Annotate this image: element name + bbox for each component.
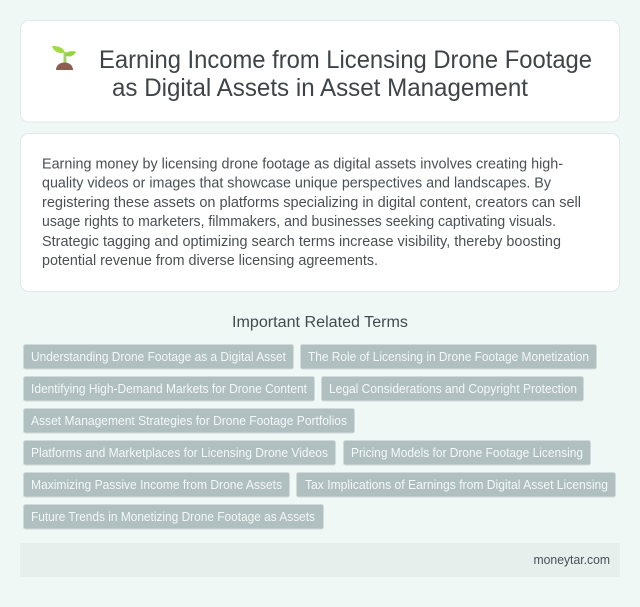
tag: Pricing Models for Drone Footage Licensing bbox=[351, 445, 583, 460]
tag: Identifying High-Demand Markets for Drone Content bbox=[31, 381, 307, 396]
description text: Earning money by licensing drone footage as digital assets involves creating high- bbox=[42, 156, 563, 172]
description text: registering these assets on platforms specializing in digital content, creators can sell bbox=[42, 194, 581, 211]
tag bbox=[296, 472, 616, 497]
tag: Legal Considerations and Copyright Protection bbox=[329, 381, 577, 396]
tag bbox=[344, 440, 590, 465]
tag: Future Trends in Monetizing Drone Footage as Assets bbox=[31, 509, 315, 524]
title: Earning Income from Licensing Drone Footage bbox=[99, 46, 592, 74]
tag: Understanding Drone Footage as a Digital Asset bbox=[31, 349, 286, 364]
heading: related terms: Important Related Terms bbox=[232, 314, 408, 331]
tag bbox=[24, 472, 290, 497]
tag bbox=[24, 408, 354, 433]
footer bar bbox=[20, 543, 620, 577]
tag: Platforms and Marketplaces for Licensing Drone Videos bbox=[31, 445, 328, 460]
description text bbox=[42, 156, 581, 269]
icon: seedling bbox=[52, 46, 76, 70]
panel: title card bbox=[20, 20, 620, 122]
title bbox=[99, 46, 592, 102]
title: as Digital Assets in Asset Management bbox=[112, 74, 528, 102]
tag list bbox=[24, 344, 616, 529]
description text: potential revenue from diverse licensing agreements. bbox=[42, 252, 378, 269]
tag: Maximizing Passive Income from Drone Assets bbox=[31, 477, 282, 492]
tag bbox=[24, 376, 314, 401]
tag: Tax Implications of Earnings from Digital Asset Licensing bbox=[305, 477, 608, 492]
description text: Strategic tagging and optimizing search terms increase visibility, thereby boosting bbox=[42, 233, 561, 250]
description text: quality videos or images that showcase unique perspectives and landscapes. By bbox=[42, 174, 551, 192]
tag bbox=[24, 344, 294, 369]
panel: description card bbox=[20, 134, 620, 292]
tag bbox=[300, 344, 596, 369]
tag bbox=[24, 440, 336, 465]
tag: Asset Management Strategies for Drone Footage Portfolios bbox=[31, 413, 347, 428]
tag bbox=[322, 376, 584, 401]
footer source: moneytar.com bbox=[534, 552, 610, 567]
tag: The Role of Licensing in Drone Footage Monetization bbox=[308, 349, 589, 364]
tag bbox=[24, 504, 324, 529]
description text: usage rights to marketers, filmmakers, and businesses seeking captivating visuals. bbox=[42, 213, 556, 230]
